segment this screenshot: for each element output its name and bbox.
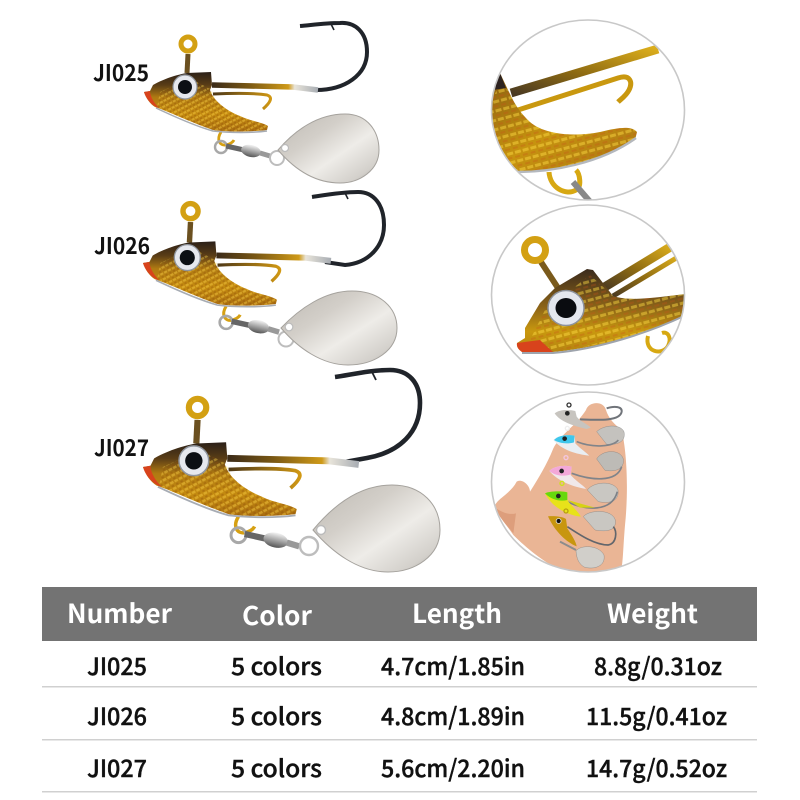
table row: JI025: 4.7cm/1.85in (381, 647, 525, 682)
table row: JI025: 5 colors (231, 647, 322, 682)
table row: JI026: 11.5g/0.41oz (586, 697, 727, 732)
table header bar: Length (412, 594, 502, 631)
lure: JI026 (143, 192, 397, 365)
detail circle: tail and weed guard (491, 20, 684, 204)
detail circle: five colour lures on hand (492, 392, 684, 572)
table row: JI025: 8.8g/0.31oz (594, 647, 722, 682)
lure: JI025 (144, 23, 379, 183)
table header bar: Weight (607, 594, 698, 631)
table row: JI027: 5.6cm/2.20in (381, 749, 525, 784)
lure: JI027 (143, 370, 440, 572)
table row: JI027 (42, 749, 757, 792)
label: JI026: JI026 (94, 227, 150, 261)
label: JI025: JI025 (93, 54, 149, 88)
table row: JI026: JI026 (87, 697, 147, 732)
table row: JI027: 14.7g/0.52oz (586, 749, 727, 784)
table row: JI027: JI027 (87, 749, 147, 784)
table header bar (42, 587, 757, 641)
table row: JI025 (42, 647, 757, 688)
table row: JI026: 5 colors (231, 697, 322, 732)
table row: JI026 (42, 697, 757, 740)
table row: JI025: JI025 (87, 647, 147, 682)
table header bar: Color (242, 596, 313, 633)
table header bar: Number (67, 594, 173, 631)
detail circle: head and eye (492, 205, 686, 385)
table row: JI026: 4.8cm/1.89in (381, 697, 525, 732)
label: JI027: JI027 (94, 429, 149, 463)
table row: JI027: 5 colors (231, 749, 322, 784)
